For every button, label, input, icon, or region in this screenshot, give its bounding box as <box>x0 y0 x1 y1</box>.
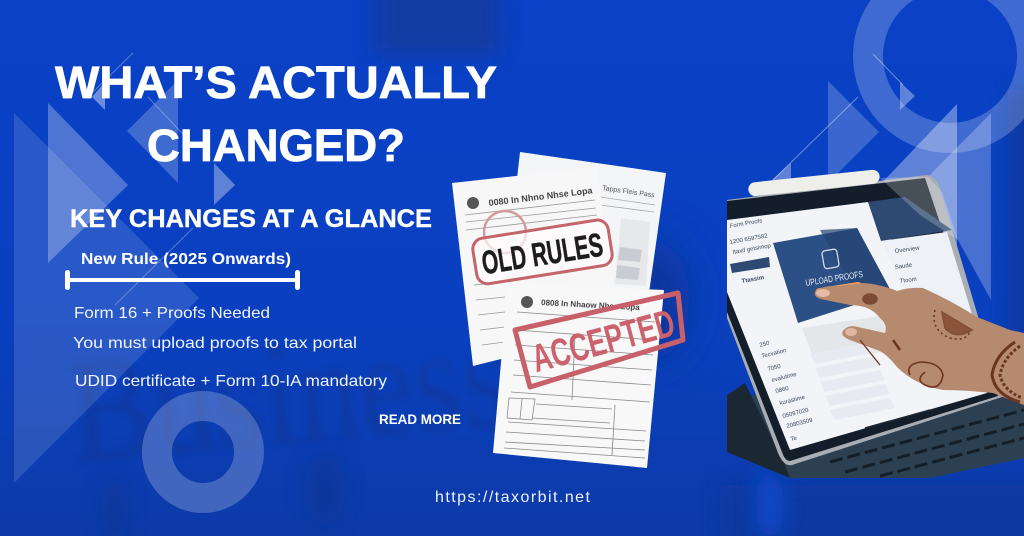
sidebar labels: 7050 <box>767 364 782 373</box>
sidebar labels: Ttassim <box>741 275 765 285</box>
glass reflection <box>880 177 958 240</box>
henna <box>860 294 1022 402</box>
sidebar labels: Itaxif getsimop <box>732 243 772 256</box>
front document <box>493 283 683 468</box>
sidebar labels: 1200 6597582 <box>729 233 769 246</box>
sidebar labels: kurastime <box>779 395 806 407</box>
left document: 0080 In Nhno Nhse Lopa <box>488 185 594 208</box>
accepted stamp <box>515 293 683 387</box>
title <box>55 57 497 171</box>
right panel labels <box>894 245 921 285</box>
sidebar labels: Form Proofs <box>729 218 763 230</box>
sidebar labels: 0860 <box>775 386 790 395</box>
old rules stamp: OLD RULES <box>479 226 605 281</box>
sidebar labels: Tecvation <box>761 348 787 360</box>
back document: Tapps Fleis Pass <box>602 185 656 199</box>
front document: 0808 In Nhaow Nhse Lopa <box>541 298 640 312</box>
subheading: KEY CHANGES AT A GLANCE <box>70 205 432 233</box>
right panel labels: Ttoom <box>899 277 917 285</box>
website url: https://taxorbit.net <box>435 489 591 506</box>
grey button <box>802 316 895 362</box>
tablet <box>727 169 1024 478</box>
hand <box>815 283 1024 405</box>
right panel labels: Saude <box>894 263 913 271</box>
sidebar labels <box>729 218 814 443</box>
sidebar labels: evalutime <box>771 372 798 384</box>
right panel labels: Overview <box>894 245 921 255</box>
title: CHANGED? <box>147 120 405 171</box>
table rows <box>810 342 895 420</box>
decorative shapes right <box>772 0 1024 300</box>
upload card <box>773 228 892 323</box>
home bar <box>865 410 930 428</box>
keyboard <box>727 390 1024 478</box>
read more: READ MORE <box>379 412 461 427</box>
back document <box>505 152 666 300</box>
fingernails <box>816 289 830 297</box>
stand <box>727 383 790 478</box>
decorative shapes left <box>14 53 235 483</box>
sidebar labels: 05097020 <box>782 408 810 420</box>
documents <box>452 152 683 468</box>
watermark: blurred word: Business <box>63 291 516 495</box>
round seal <box>484 211 526 253</box>
list text <box>73 305 387 390</box>
list text: You must upload proofs to tax portal <box>73 335 357 352</box>
bezel <box>727 175 1002 465</box>
sidebar labels: 250 <box>759 341 771 349</box>
sidebar labels: 20803509 <box>786 418 814 430</box>
list text: Form 16 + Proofs Needed <box>74 305 270 322</box>
pencil <box>748 169 880 197</box>
left document <box>452 167 614 366</box>
old rules stamp <box>471 218 614 285</box>
title: WHAT’S ACTUALLY <box>55 57 497 108</box>
upload card: UPLOAD PROOFS <box>805 269 864 288</box>
list text: UDID certificate + Form 10-IA mandatory <box>75 373 387 390</box>
sidebar labels: Te <box>790 435 798 443</box>
screen <box>727 202 987 450</box>
bracket rule <box>65 270 300 290</box>
right dark panel of screen <box>868 197 952 241</box>
column label: New Rule (2025 Onwards) <box>81 251 291 268</box>
sidebar item <box>730 257 770 273</box>
accepted stamp: ACCEPTED <box>527 302 679 381</box>
decorative ring bottom left <box>157 406 249 498</box>
